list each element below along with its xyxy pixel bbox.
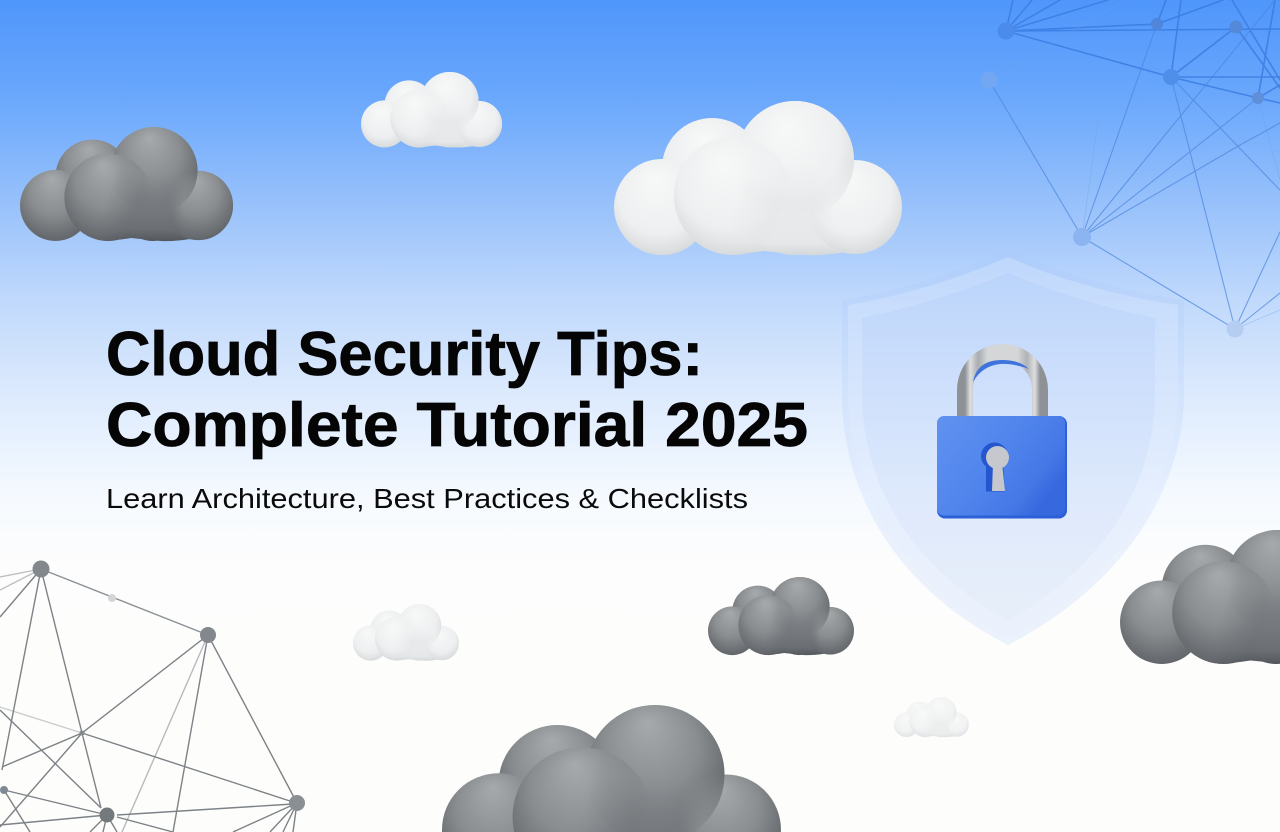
cloud: grey right — [1120, 530, 1280, 664]
subtitle: Learn Architecture, Best Practices & Checklists — [106, 483, 748, 514]
cloud: small white middle — [353, 604, 459, 661]
cloud: small white top — [361, 72, 502, 148]
padlock icon — [937, 352, 1067, 518]
cloud: grey top left — [20, 127, 233, 241]
cloud: faint tiny — [894, 697, 969, 737]
network nodes: bottom left — [0, 560, 305, 822]
padlock shackle — [965, 352, 1040, 418]
title: Cloud Security Tips: — [106, 320, 703, 389]
network nodes: top right — [980, 18, 1264, 338]
cloud: grey middle — [708, 577, 854, 655]
network graphic: top right — [980, 0, 1280, 338]
title — [106, 320, 808, 460]
title: Complete Tutorial 2025 — [106, 391, 808, 460]
cloud: large white top center — [614, 101, 902, 255]
network graphic: bottom left — [0, 560, 305, 832]
padlock body — [937, 360, 1067, 518]
shield watermark — [842, 250, 1184, 645]
cloud: large grey bottom — [442, 705, 781, 832]
keyhole — [981, 442, 1009, 492]
